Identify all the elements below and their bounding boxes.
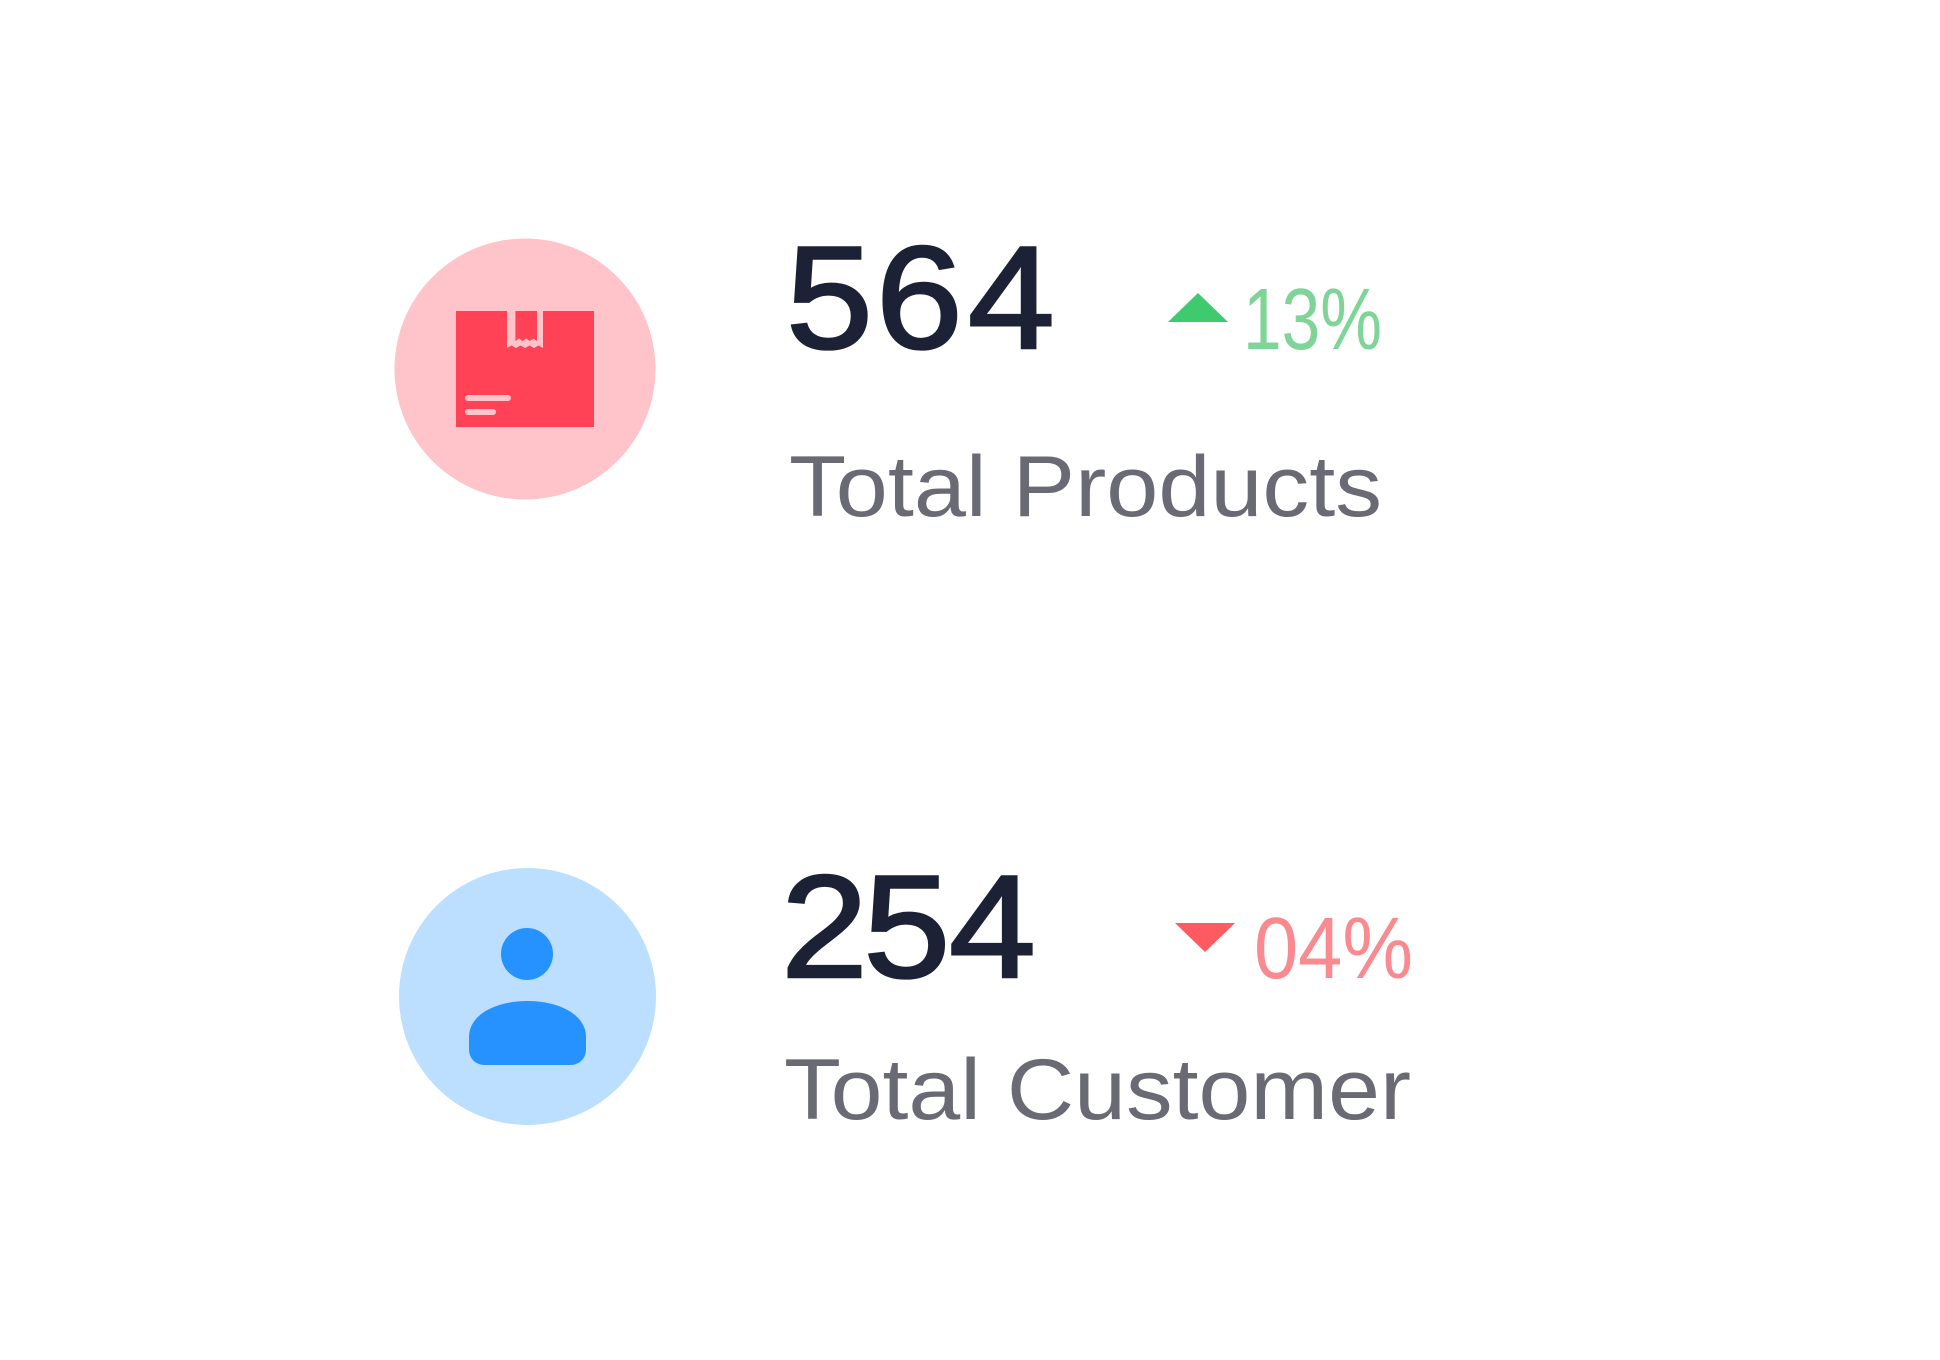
panel: total products (394, 217, 1382, 535)
change: 13%: 13% (1243, 271, 1382, 368)
number: 564: 564 (786, 217, 1055, 380)
icon: up triangle (1168, 293, 1228, 322)
change: 04%: 04% (1254, 900, 1413, 997)
number: 254: 254 (781, 846, 1036, 1009)
icon: person in blue circle (399, 868, 656, 1125)
panel: total customer (399, 846, 1413, 1138)
icon: down triangle (1175, 923, 1235, 952)
label: Total Customer: Total Customer (784, 1042, 1411, 1138)
icon: package box in pink circle (394, 238, 656, 500)
label: Total Products: Total Products (789, 439, 1382, 535)
